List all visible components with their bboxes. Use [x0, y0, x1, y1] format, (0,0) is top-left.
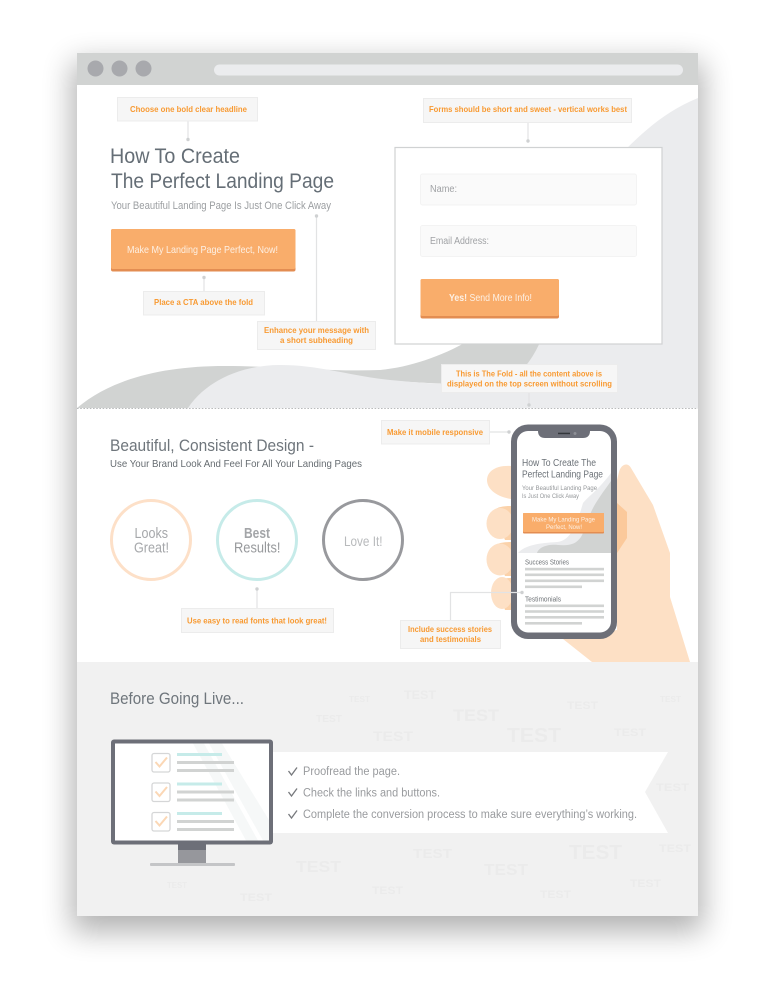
- checkbox row 3: [152, 812, 234, 831]
- test watermarks: TEST: [316, 714, 342, 725]
- heading: How To Create: [110, 145, 240, 168]
- phone button: [523, 513, 604, 534]
- testimonials: [525, 596, 604, 625]
- window shadow: [72, 62, 703, 932]
- CTA button: [111, 229, 296, 272]
- callout: CTA: [144, 276, 264, 315]
- callout: the fold: displayed on the top screen without scrolling: [447, 378, 612, 388]
- section heading: design: Use Your Brand Look And Feel For All Your Landing Pages: [110, 458, 362, 470]
- test watermarks: TEST: [167, 881, 187, 890]
- circle: looks great: Great!: [134, 540, 169, 556]
- submit button: Yes! Send More Info!: [449, 292, 532, 304]
- submit button: [420, 279, 559, 318]
- circle: love it: Love It!: [344, 533, 382, 549]
- callout: headline: [118, 98, 258, 141]
- callout: subheading: a short subheading: [280, 335, 353, 345]
- test watermarks: TEST: [507, 725, 561, 747]
- email field: [420, 226, 636, 256]
- success stories: [525, 560, 604, 588]
- form: [395, 148, 662, 344]
- browser top bar: [77, 53, 698, 85]
- browser window: [77, 53, 698, 916]
- icon: hand: [486, 465, 690, 662]
- section heading: before going live: Before Going Live...: [110, 689, 244, 708]
- section heading: design: [110, 436, 362, 470]
- callout: mobile: [382, 420, 511, 444]
- section heading: design: Beautiful, Consistent Design -: [110, 436, 314, 455]
- callout: testimonials: [400, 591, 524, 648]
- testimonials: Testimonials: [525, 596, 561, 604]
- test watermarks: TEST: [404, 688, 437, 702]
- test watermarks: TEST: [659, 843, 691, 855]
- test watermarks: TEST: [453, 706, 500, 725]
- name field: [420, 174, 636, 205]
- success stories: Success Stories: [525, 560, 569, 566]
- email field: Email Address:: [430, 236, 489, 247]
- test watermarks: TEST: [240, 892, 272, 904]
- callout: subheading: Enhance your message with: [264, 325, 369, 335]
- phone heading: [522, 458, 603, 480]
- background hills: [77, 98, 698, 408]
- test watermarks: TEST: [413, 846, 452, 861]
- phone subheading: Is Just One Click Away: [522, 493, 580, 500]
- panel: before going live: [77, 662, 698, 916]
- callout: CTA: Place a CTA above the fold: [154, 297, 253, 307]
- test watermarks: TEST: [296, 859, 341, 876]
- callout: the fold: [442, 364, 618, 407]
- test watermarks: TEST: [656, 782, 689, 794]
- heading: The Perfect Landing Page: [111, 170, 334, 193]
- circle: looks great: [112, 500, 190, 580]
- phone subheading: Your Beautiful Landing Page: [522, 485, 597, 492]
- notch: [538, 431, 590, 438]
- phone hills: [518, 473, 611, 553]
- ribbon checklist: [270, 752, 668, 833]
- test watermarks: TEST: [630, 878, 661, 890]
- test watermarks: TEST: [540, 889, 571, 901]
- phone subheading: [522, 485, 597, 500]
- heading: [110, 145, 334, 193]
- name field: Name:: [430, 184, 457, 195]
- callout: mobile: Make it mobile responsive: [387, 427, 483, 437]
- phone button: Perfect, Now!: [546, 524, 582, 531]
- phone heading: How To Create The: [522, 458, 596, 469]
- circle: best results: Results!: [234, 540, 280, 556]
- check item 3: Complete the conversion process to make sure everything’s working.: [303, 809, 637, 821]
- test watermarks: [167, 688, 691, 904]
- phone button: Make My Landing Page: [532, 516, 595, 524]
- callout: testimonials: and testimonials: [420, 634, 481, 644]
- check item 1: Proofread the page.: [303, 766, 400, 778]
- CTA button: Make My Landing Page Perfect, Now!: [127, 244, 278, 256]
- checkbox row 1: [152, 753, 234, 772]
- test watermarks: TEST: [372, 885, 403, 897]
- callout: forms: Forms should be short and sweet - vertical works best: [429, 104, 627, 114]
- test watermarks: TEST: [349, 695, 370, 704]
- phone heading: Perfect Landing Page: [522, 470, 603, 480]
- fold line: [77, 408, 698, 410]
- circle: best results: [218, 500, 296, 580]
- circle: love it: [324, 500, 402, 580]
- test watermarks: TEST: [484, 862, 528, 879]
- callout: headline: Choose one bold clear headline: [130, 104, 247, 114]
- test watermarks: TEST: [660, 695, 681, 704]
- icon: monitor: [111, 740, 273, 866]
- test watermarks: TEST: [614, 727, 646, 739]
- circle: looks great: Looks: [134, 526, 168, 542]
- subheading: Your Beautiful Landing Page Is Just One Click Away: [111, 200, 331, 212]
- callout: subheading: [258, 214, 376, 350]
- test watermarks: TEST: [373, 728, 413, 744]
- circle: best results: Best: [244, 526, 270, 542]
- phone: [511, 424, 617, 639]
- callout: fonts: Use easy to read fonts that look great!: [187, 616, 327, 626]
- callout: the fold: This is The Fold - all the content above is: [456, 368, 602, 378]
- callout: forms: [424, 98, 632, 143]
- test watermarks: TEST: [567, 700, 598, 712]
- checkbox row 2: [152, 782, 234, 802]
- check item 2: Check the links and buttons.: [303, 788, 440, 800]
- callout: testimonials: Include success stories: [408, 624, 492, 634]
- callout: fonts: [182, 587, 334, 632]
- test watermarks: TEST: [569, 842, 622, 864]
